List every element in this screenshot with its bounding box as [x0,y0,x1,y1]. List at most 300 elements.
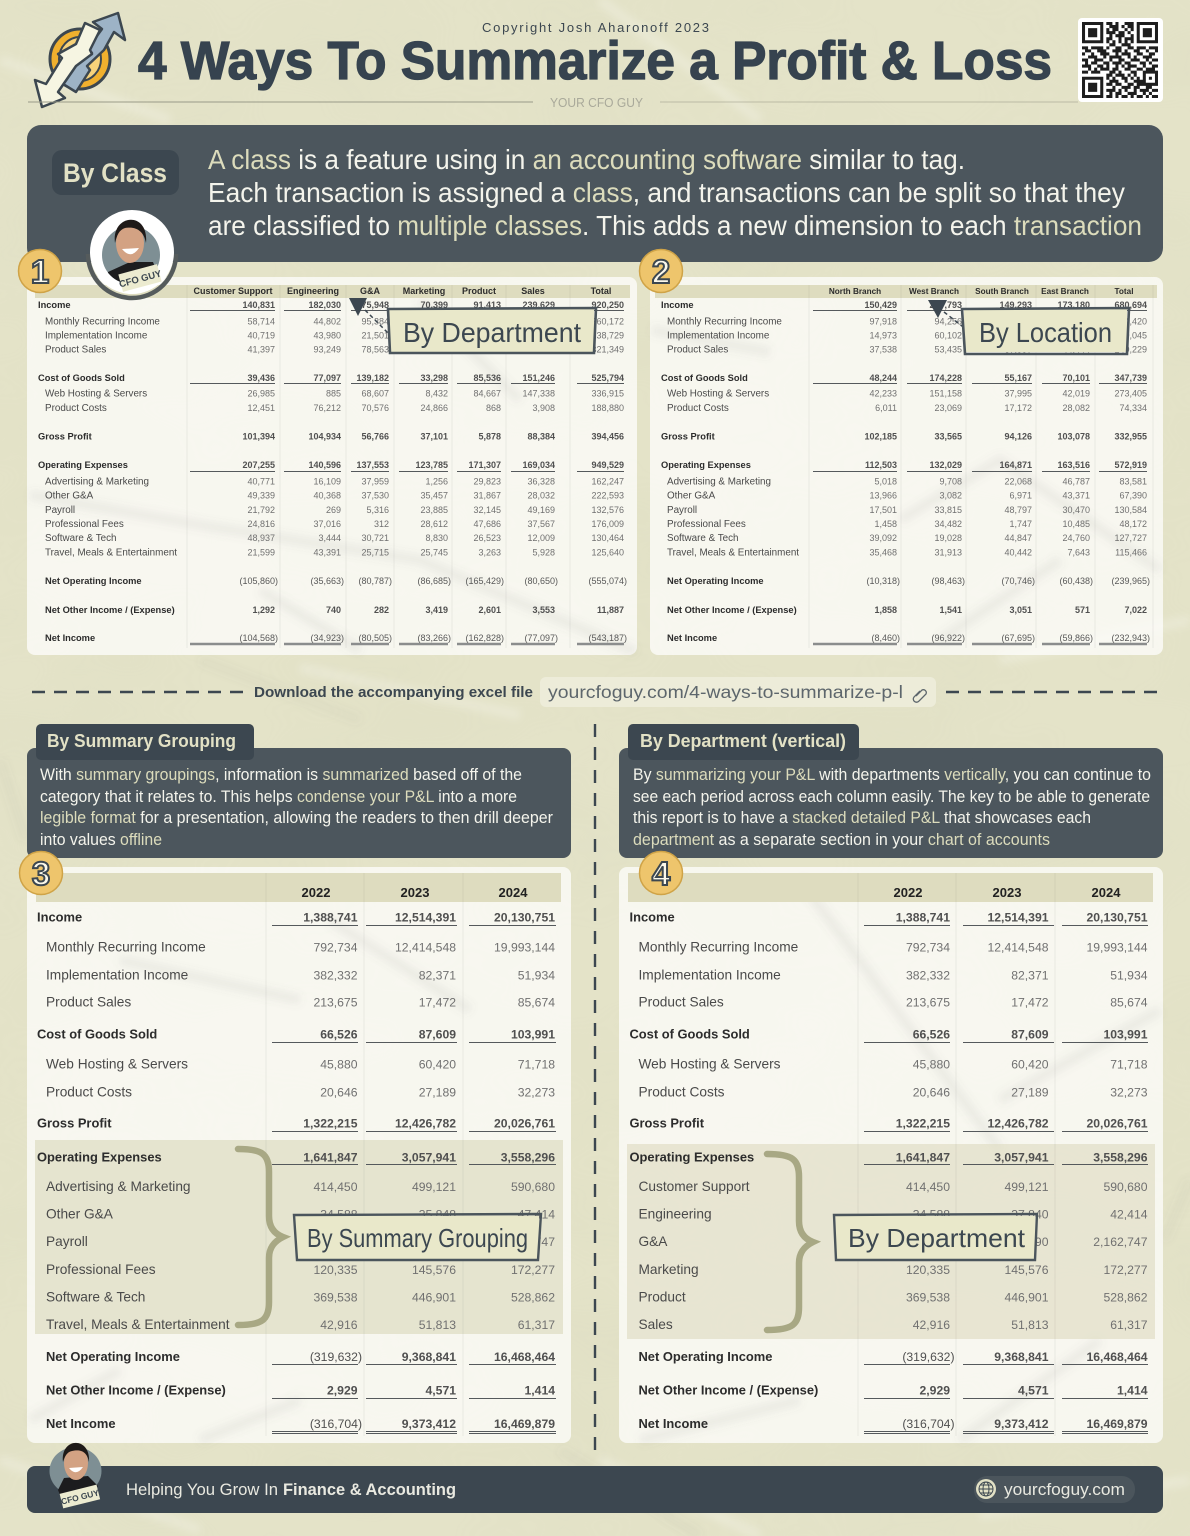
row: Operating Expenses: 164,871 [999,460,1032,470]
row: Net Other Income / (Expense): 571 [1075,605,1090,615]
row: Cost of Goods Sold: 33,298 [420,373,448,383]
row: Monthly Recurring Income: 95,384 [361,316,389,326]
row: Net Other Income / (Expense): 3,553 [532,605,555,615]
row: Product Sales: 67,997 [1004,344,1032,354]
row: Net Income [45,633,627,643]
row: Product Sales: 37,538 [869,344,897,354]
tag: CFO GUY: CFO GUY [118,268,163,290]
row: Other G&A: 35,457 [420,490,448,500]
row: Advertising & Marketing [667,476,1147,488]
row: Cost of Goods Sold: 103,991 [1103,1028,1148,1042]
row: Product: 528,862 [1103,1290,1148,1304]
row: Travel, Meals & Entertainment: 25,715 [361,548,389,558]
row: Other G&A: 49,339 [247,490,275,500]
row: Payroll: 48,797 [1004,505,1032,515]
header row: Engineering [287,286,339,296]
row: Net Operating Income: Net Operating Income [46,1349,180,1364]
row: Cost of Goods Sold: Cost of Goods Sold [661,373,748,383]
row: Other G&A [45,490,624,502]
description text [208,144,1142,241]
row: Travel, Meals & Entertainment [46,1317,555,1332]
row: Net Operating Income: (10,318) [866,576,900,586]
row: Product Costs: 32,273 [518,1086,555,1100]
row: Cost of Goods Sold [37,1026,555,1042]
row: Cost of Goods Sold: 87,609 [1011,1028,1049,1042]
row: Net Other Income / (Expense): Net Other Income / (Expense) [667,605,797,615]
row: Net Operating Income: 9,368,841 [994,1350,1049,1364]
row: Operating Expenses: Operating Expenses [37,1150,162,1164]
row: Product Costs: 28,082 [1062,403,1090,413]
row: Travel, Meals & Entertainment: 61,317 [518,1318,555,1332]
row: Cost of Goods Sold: 55,167 [1004,373,1032,383]
row: Payroll [45,505,624,516]
row: Net Income: (8,460) [871,633,900,643]
panel: table 1 by department [27,277,637,655]
row: Income: 91,413 [473,300,501,310]
row: Product Costs: 868 [486,403,501,413]
row: Product Sales [638,994,1148,1010]
row: Net Income: (104,568) [239,633,278,643]
row: Net Income: (67,695) [1001,633,1035,643]
footer tagline: Finance & Accounting [283,1481,456,1499]
row: Net Operating Income: (98,463) [931,576,965,586]
row: Product Costs: 12,451 [247,403,275,413]
badge: number 4: 4 [652,855,671,892]
row: Product Costs: Product Costs [46,1084,132,1100]
row: Operating Expenses: 1,641,847 [896,1150,950,1164]
row: Product Costs: 3,908 [532,403,555,413]
row: Net Income: (83,266) [417,633,451,643]
row: Cost of Goods Sold: 525,794 [591,373,624,383]
row: Gross Profit: Gross Profit [38,432,92,442]
row: Gross Profit: Gross Profit [37,1116,112,1130]
row: Payroll: 17,501 [869,505,897,515]
vertical divider [594,724,596,1452]
row: Advertising & Marketing: 162,247 [591,476,624,486]
row: Gross Profit: 12,426,782 [395,1116,456,1130]
row: Monthly Recurring Income: 12,414,548 [988,940,1049,954]
row: Net Operating Income: Net Operating Income [638,1349,772,1364]
row: Advertising & Marketing: 36,328 [527,476,555,486]
row: Monthly Recurring Income [46,940,555,954]
row: Net Income: Net Income [638,1416,708,1431]
row: Product Costs: 70,576 [361,403,389,413]
row: Software & Tech: 369,538 [313,1290,358,1304]
row: Gross Profit: 1,322,215 [896,1116,950,1130]
row: Net Income: Net Income [667,633,717,643]
row: Net Operating Income: Net Operating Income [667,576,764,586]
header row: South Branch [975,287,1029,296]
row: Net Operating Income: 16,468,464 [494,1350,555,1364]
row: Net Operating Income: (165,429) [465,576,504,586]
row: Net Other Income / (Expense): 4,571 [1018,1384,1049,1398]
row: Web Hosting & Servers: 273,405 [1114,388,1147,398]
row: Travel, Meals & Entertainment: 43,391 [313,548,341,558]
row: Product Costs: 27,189 [1011,1086,1049,1100]
row: Operating Expenses: 3,057,941 [402,1150,456,1164]
description text: By summarizing your P&L with departments vertically, you can continue to [633,765,1151,784]
row: Gross Profit: 88,384 [527,432,555,442]
row: Advertising & Marketing: 29,823 [473,476,501,486]
row: Advertising & Marketing: 22,068 [1004,476,1032,486]
row: Cost of Goods Sold: 48,244 [869,373,897,383]
row: Advertising & Marketing: 83,581 [1119,476,1147,486]
row: Web Hosting & Servers: 60,420 [419,1058,456,1072]
row: Product: 446,901 [1004,1290,1049,1304]
row: Implementation Income: 238,729 [591,330,624,340]
row: Cost of Goods Sold: 77,097 [313,373,341,383]
row: Net Operating Income: (239,965) [1111,576,1150,586]
row: Advertising & Marketing: 9,708 [939,476,962,486]
row: Net Other Income / (Expense): 740 [326,605,341,615]
row: Web Hosting & Servers: 42,019 [1062,388,1090,398]
row: Software & Tech: 3,444 [318,533,341,543]
row: Net Other Income / (Expense): Net Other Income / (Expense) [638,1382,818,1398]
row: Payroll: 30,470 [1062,505,1090,515]
row: Travel, Meals & Entertainment: 115,466 [1115,548,1147,558]
row: Advertising & Marketing: 46,787 [1062,476,1090,486]
row: Travel, Meals & Entertainment [667,548,1147,558]
row: Gross Profit: 101,394 [242,432,275,442]
row: Net Operating Income: (60,438) [1059,576,1093,586]
description text [633,765,1151,849]
header row: Customer Support [193,286,273,296]
row: Product Costs: 32,273 [1110,1086,1148,1100]
row: Payroll: 32,145 [473,505,501,515]
QR code [1078,18,1163,102]
row: Web Hosting & Servers: 45,880 [913,1058,950,1072]
row: Product Costs: Product Costs [638,1084,725,1100]
row: Other G&A: 222,593 [591,490,624,500]
logo icon: arrows over coin [35,13,125,107]
row: Implementation Income: 60,102 [934,330,962,340]
row: Implementation Income [667,330,1147,342]
header row: G&A [360,286,380,296]
row: Web Hosting & Servers: 45,880 [320,1058,358,1072]
row: Other G&A: 34,588 [320,1208,358,1222]
description text: are classified to multiple classes. This adds a new dimension to each transaction [208,210,1142,241]
row: Monthly Recurring Income: 44,802 [313,316,341,326]
row: Product Costs [46,1084,555,1100]
row: Gross Profit: 33,565 [934,432,962,442]
row: Income [38,300,624,310]
row: Operating Expenses: 171,307 [468,460,501,470]
row: Product [638,1290,1148,1304]
row: Product Costs: 27,189 [419,1086,456,1100]
row: Gross Profit: 332,955 [1114,432,1147,442]
row: Professional Fees [667,519,1147,530]
row: Software & Tech [45,533,624,544]
header row [302,885,528,900]
row: Net Other Income / (Expense): 1,292 [252,605,275,615]
avatar: CFO Guy portrait [88,210,176,298]
row: Professional Fees: 176,009 [591,519,624,529]
row: Monthly Recurring Income: 12,414,548 [395,940,456,954]
row: Payroll: 49,169 [527,505,555,515]
row: Gross Profit: 103,078 [1057,432,1090,442]
download label: Download the accompanying excel file [254,684,533,701]
row: Net Income: (80,505) [358,633,392,643]
row: Professional Fees: 1,747 [1009,519,1032,529]
row: Advertising & Marketing: 590,680 [511,1180,555,1194]
row: Monthly Recurring Income: 58,714 [247,316,275,326]
row: Payroll: 132,576 [591,505,624,515]
row: Cost of Goods Sold: 70,101 [1062,373,1090,383]
row: Product Sales: 41,397 [247,344,275,354]
row: Net Other Income / (Expense): 282 [374,605,389,615]
row: Software & Tech: 30,721 [361,533,389,543]
row: Operating Expenses: 949,529 [591,460,624,470]
row: Payroll: 21,792 [247,505,275,515]
row: Net Other Income / (Expense): 2,929 [920,1384,950,1398]
row: Sales: 61,317 [1110,1318,1148,1332]
row: Web Hosting & Servers: 71,718 [1110,1058,1148,1072]
row: Product Sales: 44,444 [527,344,555,354]
row: Product Costs: 6,011 [875,403,897,413]
row: Product: Product [638,1290,686,1304]
row: Net Other Income / (Expense): 2,601 [478,605,501,615]
row: Other G&A [46,1206,555,1222]
row: Net Income: (316,704) [902,1417,954,1431]
row: Product Sales: Product Sales [45,344,106,356]
row: Web Hosting & Servers: 336,915 [591,388,624,398]
row: Income: 1,388,741 [896,910,950,924]
row: Implementation Income: 82,371 [1011,968,1049,982]
row: Software & Tech: 446,901 [412,1290,456,1304]
row: Monthly Recurring Income [45,316,624,328]
row: Other G&A [667,490,1147,502]
row: Net Other Income / (Expense): 3,051 [1009,605,1032,615]
row: Cost of Goods Sold: 139,182 [356,373,389,383]
row: Professional Fees: 34,482 [934,519,962,529]
row: Cost of Goods Sold: 151,246 [522,373,555,383]
header row: 2024 [499,885,528,900]
row: Sales: Sales [638,1317,673,1332]
row: Customer Support: 414,450 [906,1180,950,1194]
row: Product Sales: Product Sales [667,344,728,356]
row: Net Operating Income: (86,685) [417,576,451,586]
row: Professional Fees: Professional Fees [46,1262,156,1277]
row: Professional Fees: 48,172 [1119,519,1147,529]
row: Travel, Meals & Entertainment: 25,745 [420,548,448,558]
row: Software & Tech: 48,937 [247,533,275,543]
row: Advertising & Marketing: Advertising & Marketing [45,476,149,488]
row: Implementation Income: 82,371 [419,968,456,982]
row: Cost of Goods Sold: 39,436 [247,373,275,383]
header row [829,287,1133,296]
row: Operating Expenses: Operating Expenses [38,460,128,470]
row: Travel, Meals & Entertainment: 21,599 [247,548,275,558]
row: Gross Profit: 37,101 [420,432,448,442]
row: Advertising & Marketing: Advertising & Marketing [667,476,771,488]
URL pill: yourcfoguy.com/4-ways-to-summarize-p-l [548,682,903,702]
row: Implementation Income: 382,332 [313,968,358,982]
row: Software & Tech: 19,028 [934,533,962,543]
row: Web Hosting & Servers: 151,158 [929,388,962,398]
header row: Product [462,286,496,296]
row: Operating Expenses [630,1150,1148,1164]
panel: By Summary Grouping description [27,724,571,858]
row: Implementation Income: 21,501 [361,330,389,340]
row: Net Income: (34,923) [310,633,344,643]
row: Advertising & Marketing: 499,121 [412,1180,456,1194]
row: Other G&A: 28,032 [527,490,555,500]
row: Web Hosting & Servers: Web Hosting & Servers [46,1056,188,1072]
badge: By Class [52,150,179,195]
description text: category that it relates to. This helps condense your P&L into a more [40,787,517,806]
row: Software & Tech: 24,760 [1062,533,1090,543]
badge: number 4 [640,852,682,894]
row: Gross Profit: 102,185 [864,432,897,442]
description text: see each period across each column easily. The key to be able to generate [633,787,1150,806]
row: Software & Tech: 127,727 [1114,533,1147,543]
row: Income: 12,514,391 [988,910,1049,924]
row: Implementation Income: 51,934 [1110,968,1148,982]
row: Product Sales: 78,563 [361,344,389,354]
row: Implementation Income: 40,719 [247,330,275,340]
row: Travel, Meals & Entertainment: 31,913 [934,548,962,558]
description text: With summary groupings, information is summarized based off of the [40,765,522,784]
row: Product Costs: 76,212 [313,403,341,413]
row: Income: 239,629 [522,300,555,310]
row: Product Sales: 213,675 [906,996,950,1010]
row: Travel, Meals & Entertainment: 5,928 [532,548,555,558]
row: Gross Profit: 104,934 [308,432,341,442]
header row: East Branch [1041,287,1089,296]
row: Professional Fees: Professional Fees [667,519,746,530]
header row: Marketing [403,286,445,296]
row: Monthly Recurring Income [638,940,1148,954]
row: Product Sales [667,344,1147,356]
row: Net Other Income / (Expense) [638,1382,1148,1398]
row: Operating Expenses: Operating Expenses [661,460,751,470]
row: Operating Expenses [661,460,1147,470]
row: Software & Tech: Software & Tech [46,1290,145,1304]
row: Operating Expenses: 112,503 [865,460,897,470]
row: Professional Fees: 10,485 [1062,519,1090,529]
panel: table 2 by location [650,277,1163,655]
tab: By Summary Grouping: By Summary Grouping [47,731,236,751]
row: Web Hosting & Servers [46,1056,555,1072]
panel: By Department vertical description [619,724,1163,858]
row: Sales [638,1317,1148,1332]
row: Engineering: 37,840 [1011,1208,1049,1222]
row: Net Income: (77,097) [524,633,558,643]
row: Software & Tech: Software & Tech [667,533,738,544]
row: Net Operating Income: (80,787) [358,576,392,586]
row: Product Sales: 85,674 [1110,996,1148,1010]
row: Marketing: 120,335 [906,1263,950,1277]
header row: Total [1115,287,1133,296]
row: Advertising & Marketing: 37,959 [361,476,389,486]
row: Product Costs: 23,069 [934,403,962,413]
row: Web Hosting & Servers: 60,420 [1011,1058,1049,1072]
row: Implementation Income: Implementation Income [45,330,148,342]
row: Web Hosting & Servers [667,388,1147,400]
callout: By Department pointer and label [349,298,596,353]
row: Product Costs: 20,646 [913,1086,950,1100]
row: Net Operating Income: 16,468,464 [1086,1350,1148,1364]
row: Cost of Goods Sold: 103,991 [511,1028,555,1042]
row: Product Sales: 37,849 [420,344,448,354]
row: Net Operating Income: 9,368,841 [402,1350,456,1364]
row: Income: 149,293 [999,300,1032,310]
callout: By Department pointer and label: By Department [403,317,581,348]
row: Marketing: 145,576 [1004,1263,1049,1277]
row: Monthly Recurring Income: 19,993,144 [494,940,555,954]
row: Product Sales: 17,472 [419,996,456,1010]
row: Net Operating Income [638,1349,1148,1364]
row: Advertising & Marketing [46,1179,555,1194]
header row: Total [591,286,611,296]
row: Other G&A: 37,530 [361,490,389,500]
row: Marketing [638,1262,1148,1277]
row: Income: 20,130,751 [1086,910,1148,924]
row: Advertising & Marketing [45,476,624,488]
row: Income [630,910,1148,924]
row: Engineering: 42,414 [1110,1208,1148,1222]
row: Gross Profit: 394,456 [591,432,624,442]
row: Monthly Recurring Income: 19,993,144 [1086,940,1148,954]
callout: By Summary Grouping [294,1214,541,1260]
row: Sales: 42,916 [913,1318,950,1332]
tab: By Department (vertical) [628,724,859,760]
row: Net Operating Income: (555,074) [588,576,627,586]
website pill [974,1476,1135,1503]
row: Net Other Income / (Expense): 4,571 [426,1384,456,1398]
row: Other G&A: 67,390 [1119,490,1147,500]
row: Web Hosting & Servers: 68,607 [361,388,389,398]
footer tagline [126,1481,456,1499]
row: Operating Expenses: 140,596 [308,460,341,470]
callout: By Department [834,1214,1037,1260]
row: Product Costs: 24,866 [420,403,448,413]
row: Net Operating Income: Net Operating Income [45,576,142,586]
row: Payroll: 33,815 [934,505,962,515]
panel: table 4 by department vertical [619,867,1163,1443]
row: Payroll: 23,885 [420,505,448,515]
row: Cost of Goods Sold: Cost of Goods Sold [38,373,125,383]
row: Cost of Goods Sold: 347,739 [1114,373,1147,383]
row: Product Sales: Product Sales [46,994,131,1010]
callout: By Location pointer and label: By Location [979,317,1112,348]
row: Web Hosting & Servers: 71,718 [518,1058,555,1072]
row: Implementation Income: 51,934 [518,968,555,982]
row: Net Income: (316,704) [310,1417,362,1431]
footer avatar [50,1443,102,1508]
row: Gross Profit [37,1116,555,1130]
row: Net Other Income / (Expense) [46,1382,555,1398]
row: Product Sales: 240,229 [1114,344,1147,354]
row: Gross Profit [630,1116,1148,1130]
row: Product Costs [667,403,1147,414]
row: Cost of Goods Sold: 66,526 [913,1028,950,1042]
row: Net Operating Income [46,1349,555,1364]
row: Net Income: Net Income [46,1416,115,1431]
row: Income [37,910,555,924]
callout: By Department: By Department [848,1223,1026,1253]
row: Monthly Recurring Income: 97,918 [869,316,897,326]
row: Product Costs: 17,172 [1004,403,1032,413]
row: Product Sales: 213,675 [313,996,358,1010]
row: Advertising & Marketing: 414,450 [313,1180,358,1194]
description text: department as a separate section in your chart of accounts [633,830,1050,849]
row: Net Operating Income: (105,860) [239,576,278,586]
row: Cost of Goods Sold: 174,228 [929,373,962,383]
row: Payroll: Payroll [667,505,697,516]
row: Payroll: 5,316 [366,505,389,515]
row: Product Costs: Product Costs [45,403,107,414]
